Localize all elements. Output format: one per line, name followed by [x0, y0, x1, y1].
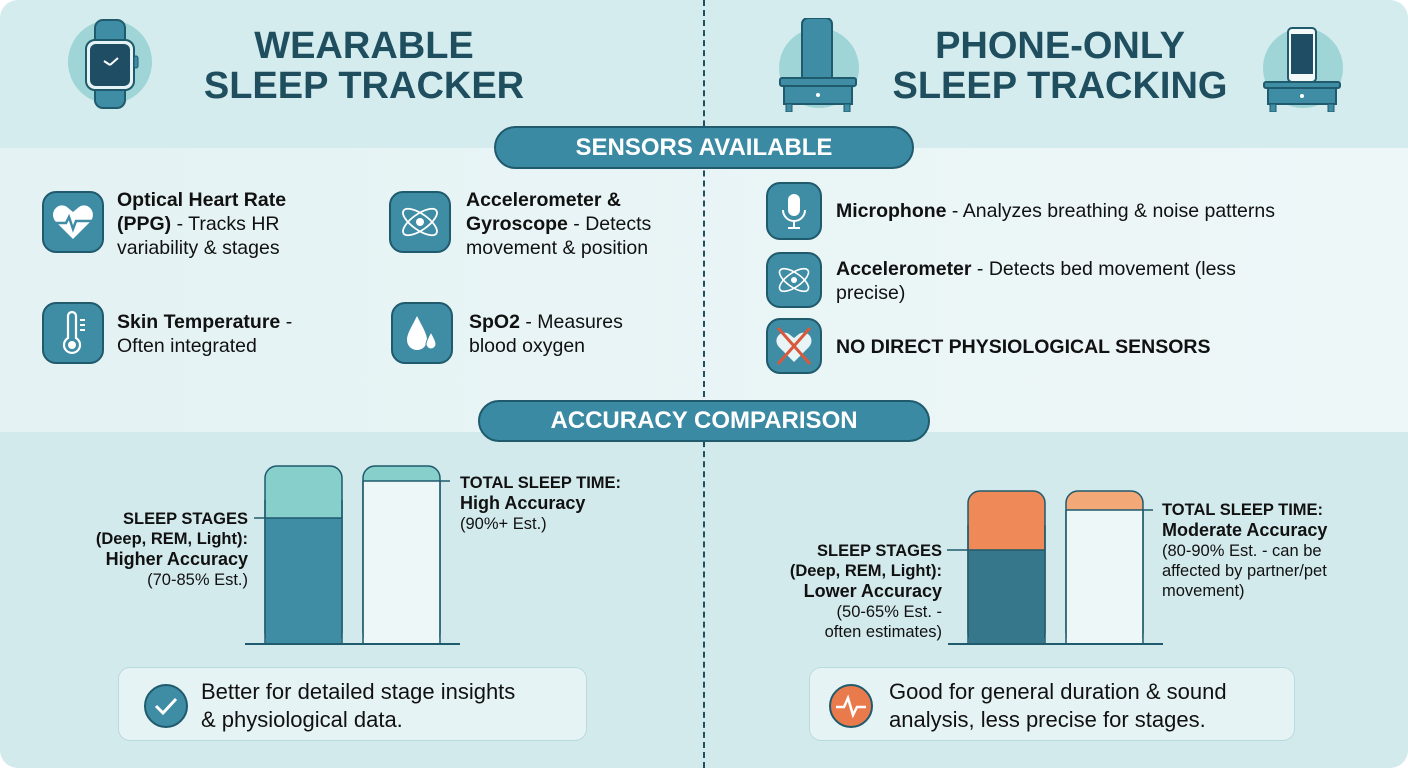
sensor: accelerometer & gyroscope: Accelerometer & Gyroscope - Detects movement & position [466, 189, 651, 259]
title: wearable [204, 25, 524, 107]
label: wearable total sleep: TOTAL SLEEP TIME: [460, 474, 621, 492]
sensor: phone accelerometer: Accelerometer - Detects bed movement (less precise) [836, 258, 1236, 304]
heading: sensors available [494, 126, 914, 169]
sensor: skin temperature: Skin Temperature - [117, 311, 292, 333]
icon: check [144, 684, 188, 728]
label: wearable total sleep: (90%+ Est.) [460, 515, 547, 533]
label: wearable sleep stages: (Deep, REM, Light): [96, 530, 248, 548]
sensor: skin temperature [42, 302, 292, 364]
icon: mic [766, 182, 822, 240]
label: wearable total sleep [460, 474, 621, 533]
sensor: microphone [766, 182, 1275, 240]
title: wearable: WEARABLE [254, 25, 474, 67]
label: wearable sleep stages: (70-85% Est.) [147, 571, 248, 589]
title: wearable: SLEEP TRACKER [204, 65, 524, 107]
sensor: no physiological: NO DIRECT PHYSIOLOGICAL SENSORS [836, 336, 1211, 358]
icon: pulse [829, 684, 873, 728]
label: wearable sleep stages: SLEEP STAGES [123, 510, 248, 528]
callout: phone summary: analysis, less precise for stages. [889, 707, 1206, 732]
icon: drops [391, 302, 453, 364]
icon: phone on nightstand 2 [1263, 27, 1343, 112]
title: phone-only [892, 25, 1228, 107]
callout: phone summary [809, 667, 1295, 741]
sensor: phone accelerometer [766, 252, 1236, 308]
title: phone-only: SLEEP TRACKING [892, 65, 1228, 107]
heading: sensors available: SENSORS AVAILABLE [576, 134, 832, 161]
callout: wearable summary: & physiological data. [201, 707, 403, 732]
label: phone total sleep [1162, 501, 1328, 600]
sensor: optical heart rate: Optical Heart Rate (PPG) - Tracks HR variability & stages [117, 189, 286, 259]
heading: accuracy comparison: ACCURACY COMPARISON [550, 407, 858, 434]
label: phone total sleep: Moderate Accuracy [1162, 520, 1327, 540]
label: phone sleep stages: SLEEP STAGES [817, 542, 942, 560]
label: phone total sleep: TOTAL SLEEP TIME: [1162, 501, 1323, 519]
icon: thermometer [42, 302, 104, 364]
label: phone sleep stages: (Deep, REM, Light): [790, 562, 942, 580]
callout: wearable summary [118, 667, 587, 741]
label: phone total sleep: (80-90% Est. - can be affected by partner/pet movement) [1162, 542, 1327, 600]
chart: wearable accuracy [245, 465, 460, 645]
sensor: optical heart rate [42, 189, 286, 259]
title: phone-only: PHONE-ONLY [935, 25, 1185, 67]
sensor: no physiological [766, 318, 1211, 374]
label: phone sleep stages [790, 542, 942, 641]
icon: atom small [766, 252, 822, 308]
sensor: skin temperature: Often integrated [117, 335, 257, 357]
icon: atom [389, 191, 451, 253]
callout: phone summary: Good for general duration & sound [889, 679, 1227, 704]
label: phone sleep stages: Lower Accuracy [804, 581, 942, 601]
icon: smartwatch [68, 19, 152, 109]
sensor: microphone: Microphone - Analyzes breathing & noise patterns [836, 200, 1275, 222]
chart: phone accuracy [947, 490, 1163, 645]
icon: phone on nightstand [779, 18, 859, 112]
label: phone sleep stages: (50-65% Est. - [837, 603, 942, 621]
icon: crossed heart [766, 318, 822, 374]
callout: wearable summary: Better for detailed stage insights [201, 679, 515, 704]
sensor: spo2: blood oxygen [469, 335, 585, 357]
label: phone sleep stages: often estimates) [825, 623, 942, 641]
sensor: spo2: SpO2 - Measures [469, 311, 623, 333]
label: wearable sleep stages: Higher Accuracy [106, 549, 248, 569]
heading: accuracy comparison [478, 400, 930, 442]
sensor: spo2 [391, 302, 623, 364]
label: wearable sleep stages [96, 510, 248, 589]
label: wearable total sleep: High Accuracy [460, 493, 585, 513]
icon: heart [42, 191, 104, 253]
